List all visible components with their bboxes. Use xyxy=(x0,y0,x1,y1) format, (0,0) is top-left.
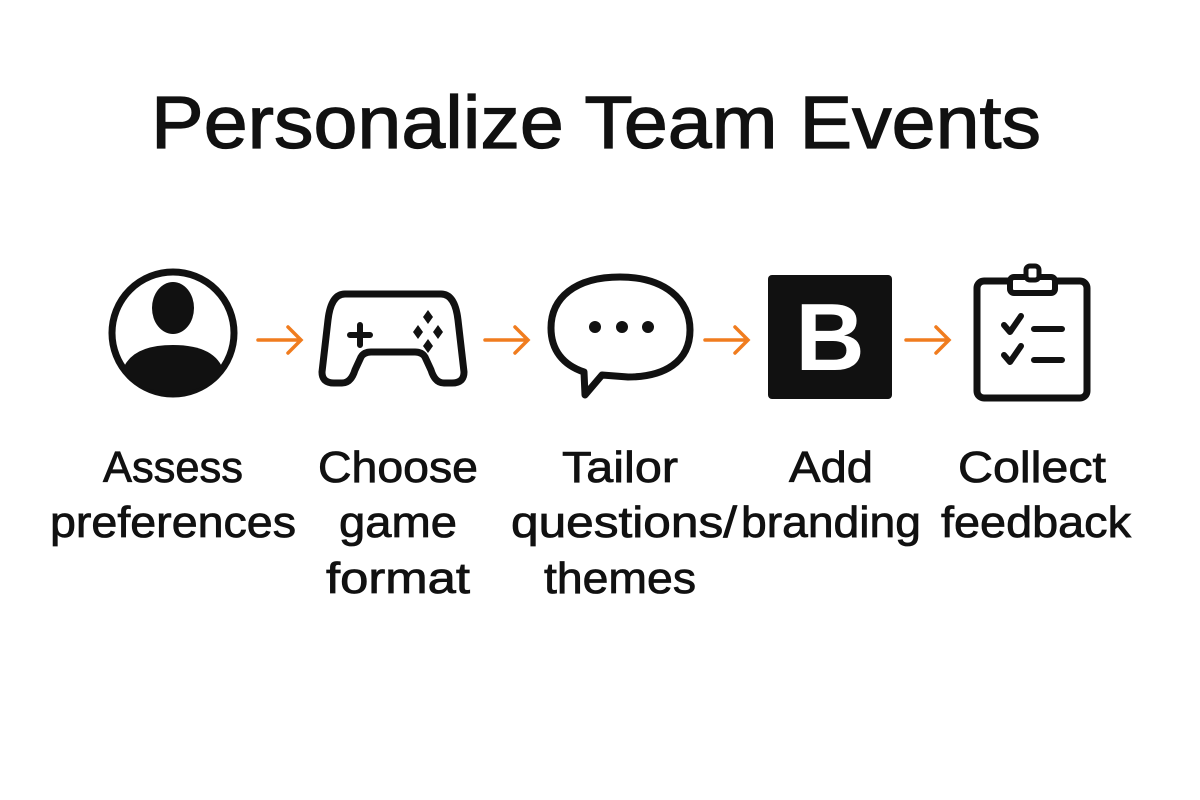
icon: branding B: B xyxy=(795,284,865,391)
label: tailor questions/themes: questions/ xyxy=(511,498,738,547)
label: tailor questions/themes: themes xyxy=(544,554,696,603)
label: choose game format xyxy=(318,443,478,603)
title: Personalize Team Events xyxy=(151,81,1041,164)
label: add branding: branding xyxy=(741,498,921,547)
icon: branding B xyxy=(768,275,892,399)
icon: clipboard xyxy=(977,266,1087,398)
label: collect feedback: Collect xyxy=(958,443,1106,492)
label: assess preferences: Assess xyxy=(103,443,243,492)
label: tailor questions/themes: Tailor xyxy=(562,443,678,492)
label: collect feedback xyxy=(941,443,1132,547)
arrow 1 xyxy=(258,327,301,353)
label: choose game format: Choose xyxy=(318,443,478,492)
arrow 4 xyxy=(906,327,949,353)
icon: person xyxy=(112,272,234,394)
label: assess preferences: preferences xyxy=(50,498,296,547)
label: choose game format: game xyxy=(339,498,457,547)
label: add branding xyxy=(741,443,921,547)
label: collect feedback: feedback xyxy=(941,498,1132,547)
label: assess preferences xyxy=(50,443,296,547)
icon: speech bubble xyxy=(551,277,690,395)
label: add branding: Add xyxy=(789,443,873,492)
arrow 3 xyxy=(705,327,748,353)
icon: game controller xyxy=(322,294,464,383)
label: choose game format: format xyxy=(326,554,470,603)
arrow 2 xyxy=(485,327,528,353)
label: tailor questions/themes xyxy=(511,443,738,603)
